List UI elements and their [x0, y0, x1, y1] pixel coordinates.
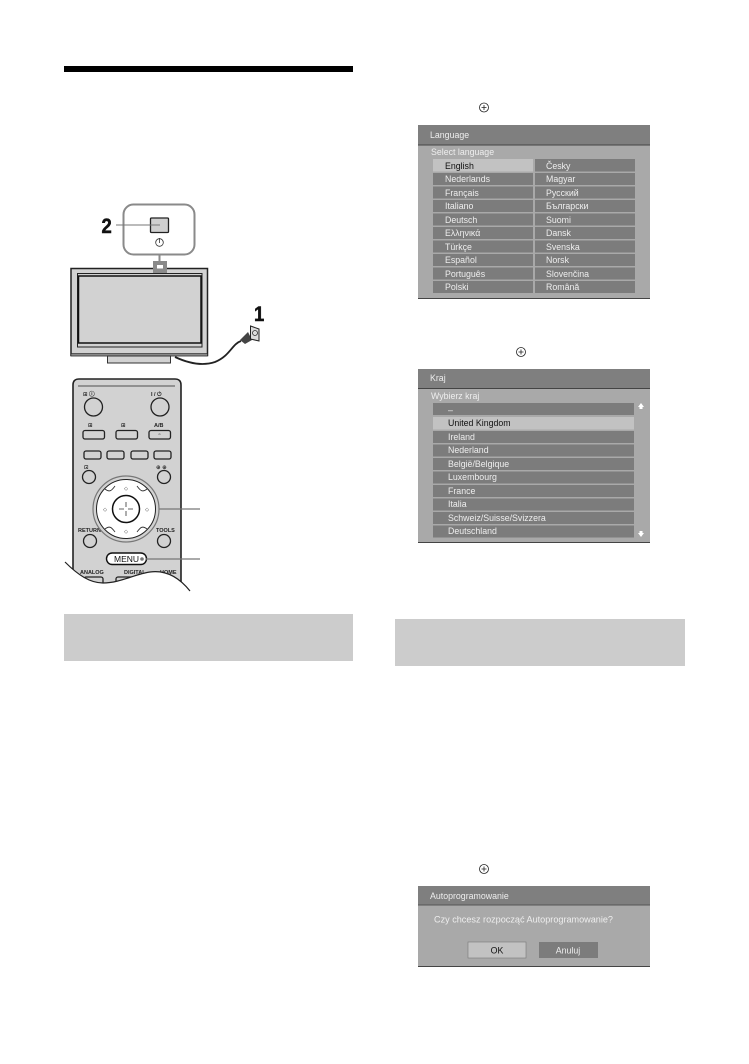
- panel: country menu: France: [448, 486, 475, 496]
- callout: power switch: [116, 204, 194, 262]
- country rows: [433, 403, 634, 538]
- remote small labels: TOOLS: [156, 528, 175, 534]
- panel: language menu: Türkçe: [445, 242, 472, 252]
- remote small labels: ⊞ ⓘ: [83, 390, 95, 398]
- remote menu button: MENU: [114, 554, 139, 564]
- panel: country menu: [418, 369, 650, 543]
- icon: enter button 3: [480, 864, 488, 874]
- panel: country menu: België/Belgique: [448, 459, 509, 469]
- remote navigation pad: ◇: [103, 507, 107, 513]
- panel: language menu: English: [445, 161, 474, 171]
- remote small labels: I / ⏻: [151, 391, 162, 398]
- panel: language menu: Русский: [546, 188, 579, 198]
- panel: country menu: Italia: [448, 499, 467, 509]
- button: OK: OK: [491, 946, 503, 956]
- panel: language menu: Svenska: [546, 242, 580, 252]
- panel: language menu: Česky: [546, 161, 571, 171]
- remote small labels: ⊡: [84, 465, 89, 471]
- panel: country menu: United Kingdom: [448, 418, 511, 428]
- panel: country menu: Luxembourg: [448, 472, 497, 482]
- remote navigation pad: [93, 476, 159, 542]
- panel: language menu: [418, 125, 650, 299]
- remote small labels: HOME: [160, 570, 177, 576]
- label: step 1: 1: [254, 303, 264, 326]
- remote small labels: DIGITAL: [124, 570, 146, 576]
- section bar: left: [64, 614, 353, 661]
- panel: language menu: Deutsch: [445, 215, 477, 225]
- icon: enter button 1: [480, 103, 488, 112]
- remote small labels: ⊞: [121, 423, 126, 429]
- scroll arrows: [638, 403, 644, 409]
- panel: country menu: Wybierz kraj: [431, 391, 479, 401]
- remote small labels: ⊕ ⊕: [156, 465, 167, 471]
- remote navigation pad: ◇: [145, 507, 149, 513]
- remote small labels: A/B: [154, 423, 164, 429]
- panel: language menu: Dansk: [546, 228, 572, 238]
- panel: country menu: Ireland: [448, 432, 475, 442]
- language rows: [433, 159, 635, 293]
- panel: language menu: Ελληνικά: [445, 228, 480, 238]
- tv set: [71, 261, 208, 363]
- section bar: right: [395, 619, 685, 666]
- remote small labels: [78, 390, 177, 576]
- title rule: [64, 66, 353, 72]
- panel: auto-program dialog: Autoprogramowanie: [430, 891, 509, 901]
- remote navigation pad: ◇: [124, 486, 128, 492]
- panel: language menu: Български: [546, 201, 588, 211]
- panel: country menu: –: [448, 405, 453, 415]
- panel: language menu: Italiano: [445, 201, 473, 211]
- panel: country menu: Deutschland: [448, 526, 497, 536]
- remote small labels: ▫: [158, 432, 160, 438]
- torn bottom edge: [65, 562, 190, 600]
- label: step 2: 2: [102, 215, 112, 238]
- panel: language menu: Slovenčina: [546, 269, 589, 279]
- panel: language menu: Norsk: [546, 255, 570, 265]
- button: OK: [468, 942, 526, 958]
- panel: language menu: Magyar: [546, 174, 575, 184]
- power cord and plug: [175, 326, 259, 364]
- icon: tv with power button callout: [71, 204, 264, 364]
- panel: language menu: Select language: [431, 147, 494, 157]
- button: Anuluj: [539, 942, 598, 958]
- remote navigation pad: ◇: [124, 529, 128, 535]
- icon: enter button 2: [516, 348, 526, 356]
- callout lines: [146, 509, 200, 559]
- icon: remote control: [65, 379, 200, 600]
- panel: language menu: Français: [445, 188, 479, 198]
- panel: language menu: Language: [430, 130, 469, 140]
- remote small labels: ANALOG: [80, 570, 104, 576]
- remote menu button: [106, 553, 146, 564]
- panel: language menu: Português: [445, 269, 486, 279]
- panel: country menu: Schweiz/Suisse/Svizzera: [448, 513, 546, 523]
- panel: auto-program dialog: Czy chcesz rozpocząć Autoprogramowanie?: [434, 914, 613, 924]
- panel: auto-program dialog: [418, 886, 650, 967]
- remote top buttons: [82, 398, 171, 587]
- panel: country menu: Nederland: [448, 445, 489, 455]
- button: Anuluj: Anuluj: [556, 946, 580, 956]
- panel: language menu: Suomi: [546, 215, 571, 225]
- panel: language menu: Română: [546, 282, 579, 292]
- panel: language menu: Nederlands: [445, 174, 491, 184]
- panel: country menu: Kraj: [430, 373, 446, 383]
- remote small labels: RETURN: [78, 528, 101, 534]
- panel: language menu: Español: [445, 255, 477, 265]
- remote small labels: ⊞: [88, 423, 93, 429]
- panel: language menu: Polski: [445, 282, 469, 292]
